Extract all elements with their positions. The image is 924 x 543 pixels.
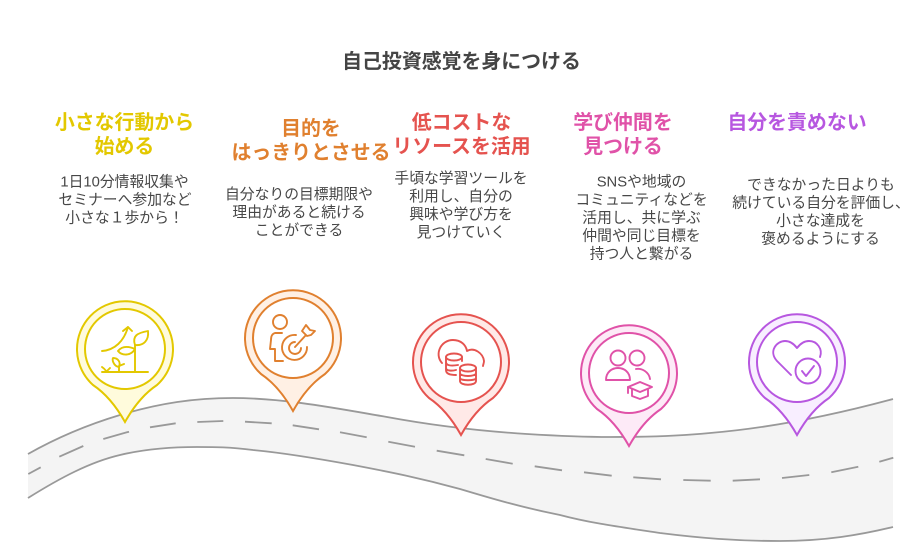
heading: step 5: 自分を責めない [727, 111, 867, 134]
heading: step 1: 始める [95, 135, 154, 158]
text: step 3: 見つけていく [417, 225, 505, 241]
text: step 1: 1日10分情報収集や [60, 174, 189, 190]
text: step 2: 自分なりの目標期限や [225, 186, 373, 203]
title: 自己投資感覚を身につける [342, 49, 581, 73]
heading: step 2: はっきりとさせる [231, 141, 391, 164]
heading: step 4: 見つける [583, 135, 663, 158]
heading: step 1: 小さな行動から [55, 111, 194, 134]
text: step 5: 続けている自分を評価し、 [732, 194, 910, 212]
pin: step 1 sprout [77, 301, 173, 422]
text: step 5: できなかった日よりも [747, 176, 895, 194]
heading: step 3: リソースを活用 [392, 135, 531, 158]
text: step 1: セミナーへ参加など [58, 192, 192, 208]
text: step 2: ことができる [255, 222, 343, 239]
pin: step 4 people with cap [581, 325, 677, 446]
pin: step 2 target [245, 290, 341, 411]
text: step 5: 褒めるようにする [761, 230, 880, 248]
heading: step 4: 学び仲間を [573, 111, 673, 134]
text: step 4: SNSや地域の [597, 174, 686, 190]
heading: step 2: 目的を [281, 117, 341, 140]
text: step 4: 活用し、共に学ぶ [582, 210, 701, 226]
road [28, 398, 893, 541]
text: step 4: 持つ人と繋がる [590, 246, 693, 262]
text: step 3: 興味や学び方を [409, 206, 513, 223]
text: step 4: コミュニティなどを [575, 192, 708, 208]
heading: step 3: 低コストな [412, 111, 511, 134]
pin: step 3 cloud database [413, 314, 509, 435]
text: step 5: 小さな達成を [776, 212, 865, 230]
icon: person with target [270, 315, 315, 361]
text: step 3: 手頃な学習ツールを [394, 170, 528, 187]
icon: two people and graduation cap [606, 350, 652, 399]
text: step 2: 理由があると続ける [232, 204, 366, 221]
text: step 1: 小さな１歩から！ [65, 210, 184, 226]
pin: step 5 heart check [749, 314, 845, 435]
icon: cloud with databases [439, 340, 484, 385]
icon: heart with check [773, 341, 821, 384]
icon: growing sprout [102, 327, 148, 372]
text: step 3: 利用し、自分の [409, 188, 513, 205]
text: step 4: 仲間や同じ目標を [582, 228, 701, 244]
